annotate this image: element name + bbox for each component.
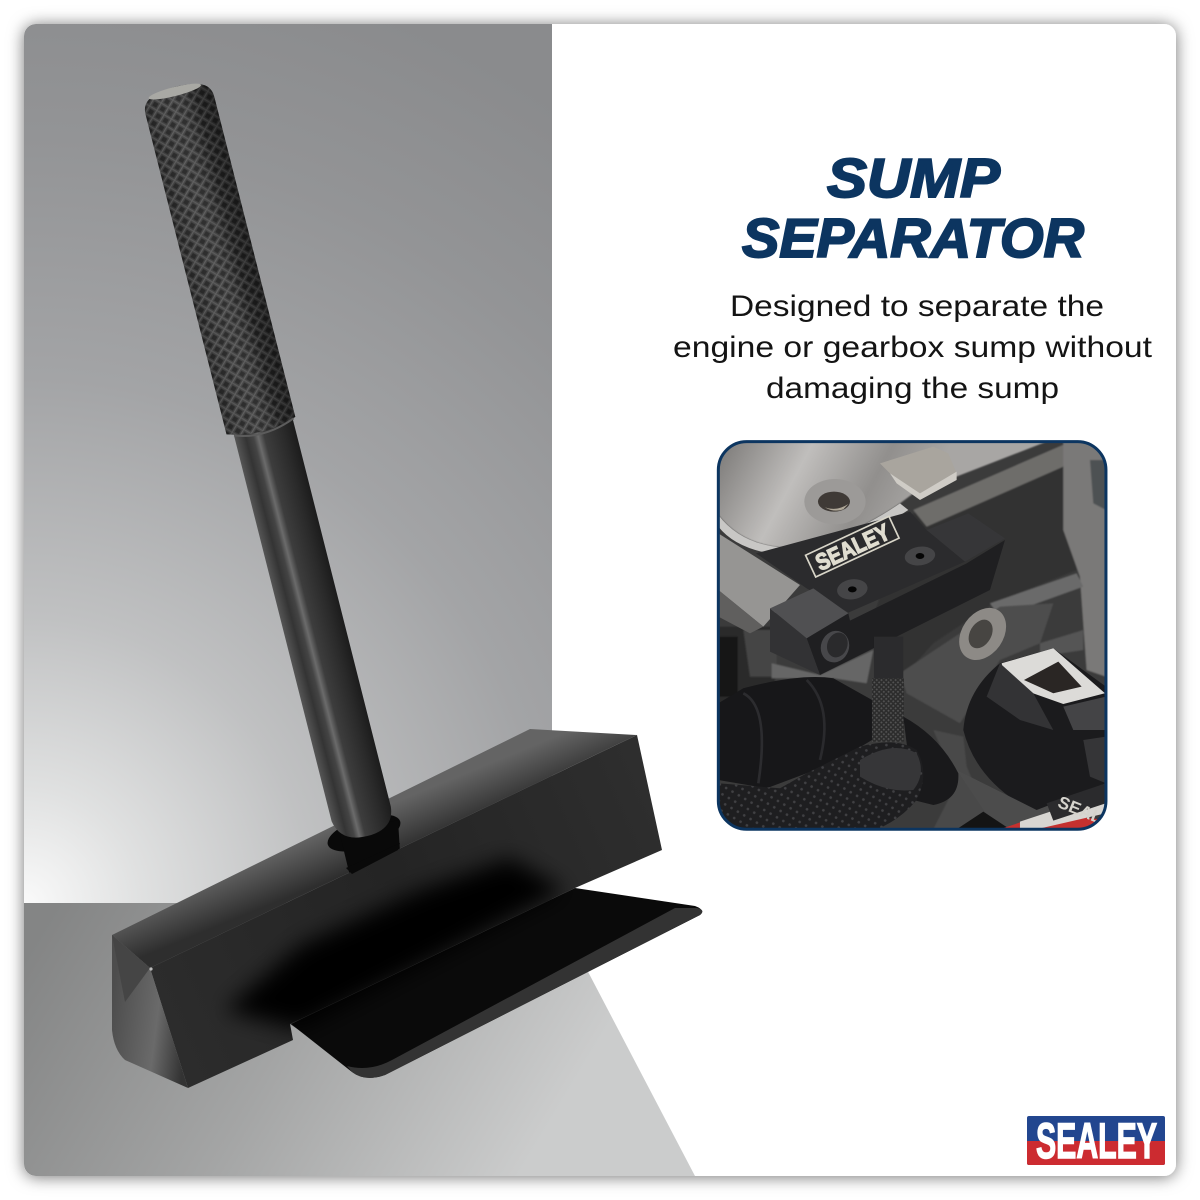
gloved hand [718, 677, 872, 788]
product block top face [112, 729, 637, 968]
wrench branding text: SEAL [1055, 792, 1106, 828]
engine casting background [718, 442, 1106, 829]
wrench red band [1004, 818, 1098, 828]
description text [673, 290, 1153, 405]
tool rod smooth section [874, 637, 903, 682]
photo inset: tool fitted to engine [718, 442, 1106, 829]
description text: damaging the sump [766, 372, 1059, 405]
product blade [291, 888, 702, 1078]
tool engraved SEALEY mark: SEALEY [811, 519, 894, 576]
tool screws [904, 546, 935, 566]
title [742, 147, 1084, 269]
description text: engine or gearbox sump without [673, 331, 1153, 364]
inset border [718, 442, 1106, 829]
separator tool in position [756, 512, 912, 612]
wrench socket foreground [963, 648, 1106, 813]
title: SUMP [827, 147, 1000, 209]
product collar shadow on edge [346, 843, 400, 874]
tool rod knurled section [872, 678, 904, 742]
sump pan [718, 442, 1047, 547]
casting washer boss [959, 608, 1006, 660]
title: SEPARATOR [742, 207, 1084, 269]
product block end face [112, 935, 188, 1088]
sump bracket tab [880, 448, 937, 494]
product block front face [150, 735, 662, 1088]
panel: grey studio backdrop [24, 24, 695, 1176]
product blade shadow on block [225, 858, 565, 1030]
description text: Designed to separate the [730, 290, 1104, 323]
sump pan bolt hole [804, 479, 866, 524]
product: sump separator tool [112, 78, 702, 1088]
product handle rod [141, 78, 399, 845]
product rod collar [323, 807, 405, 876]
